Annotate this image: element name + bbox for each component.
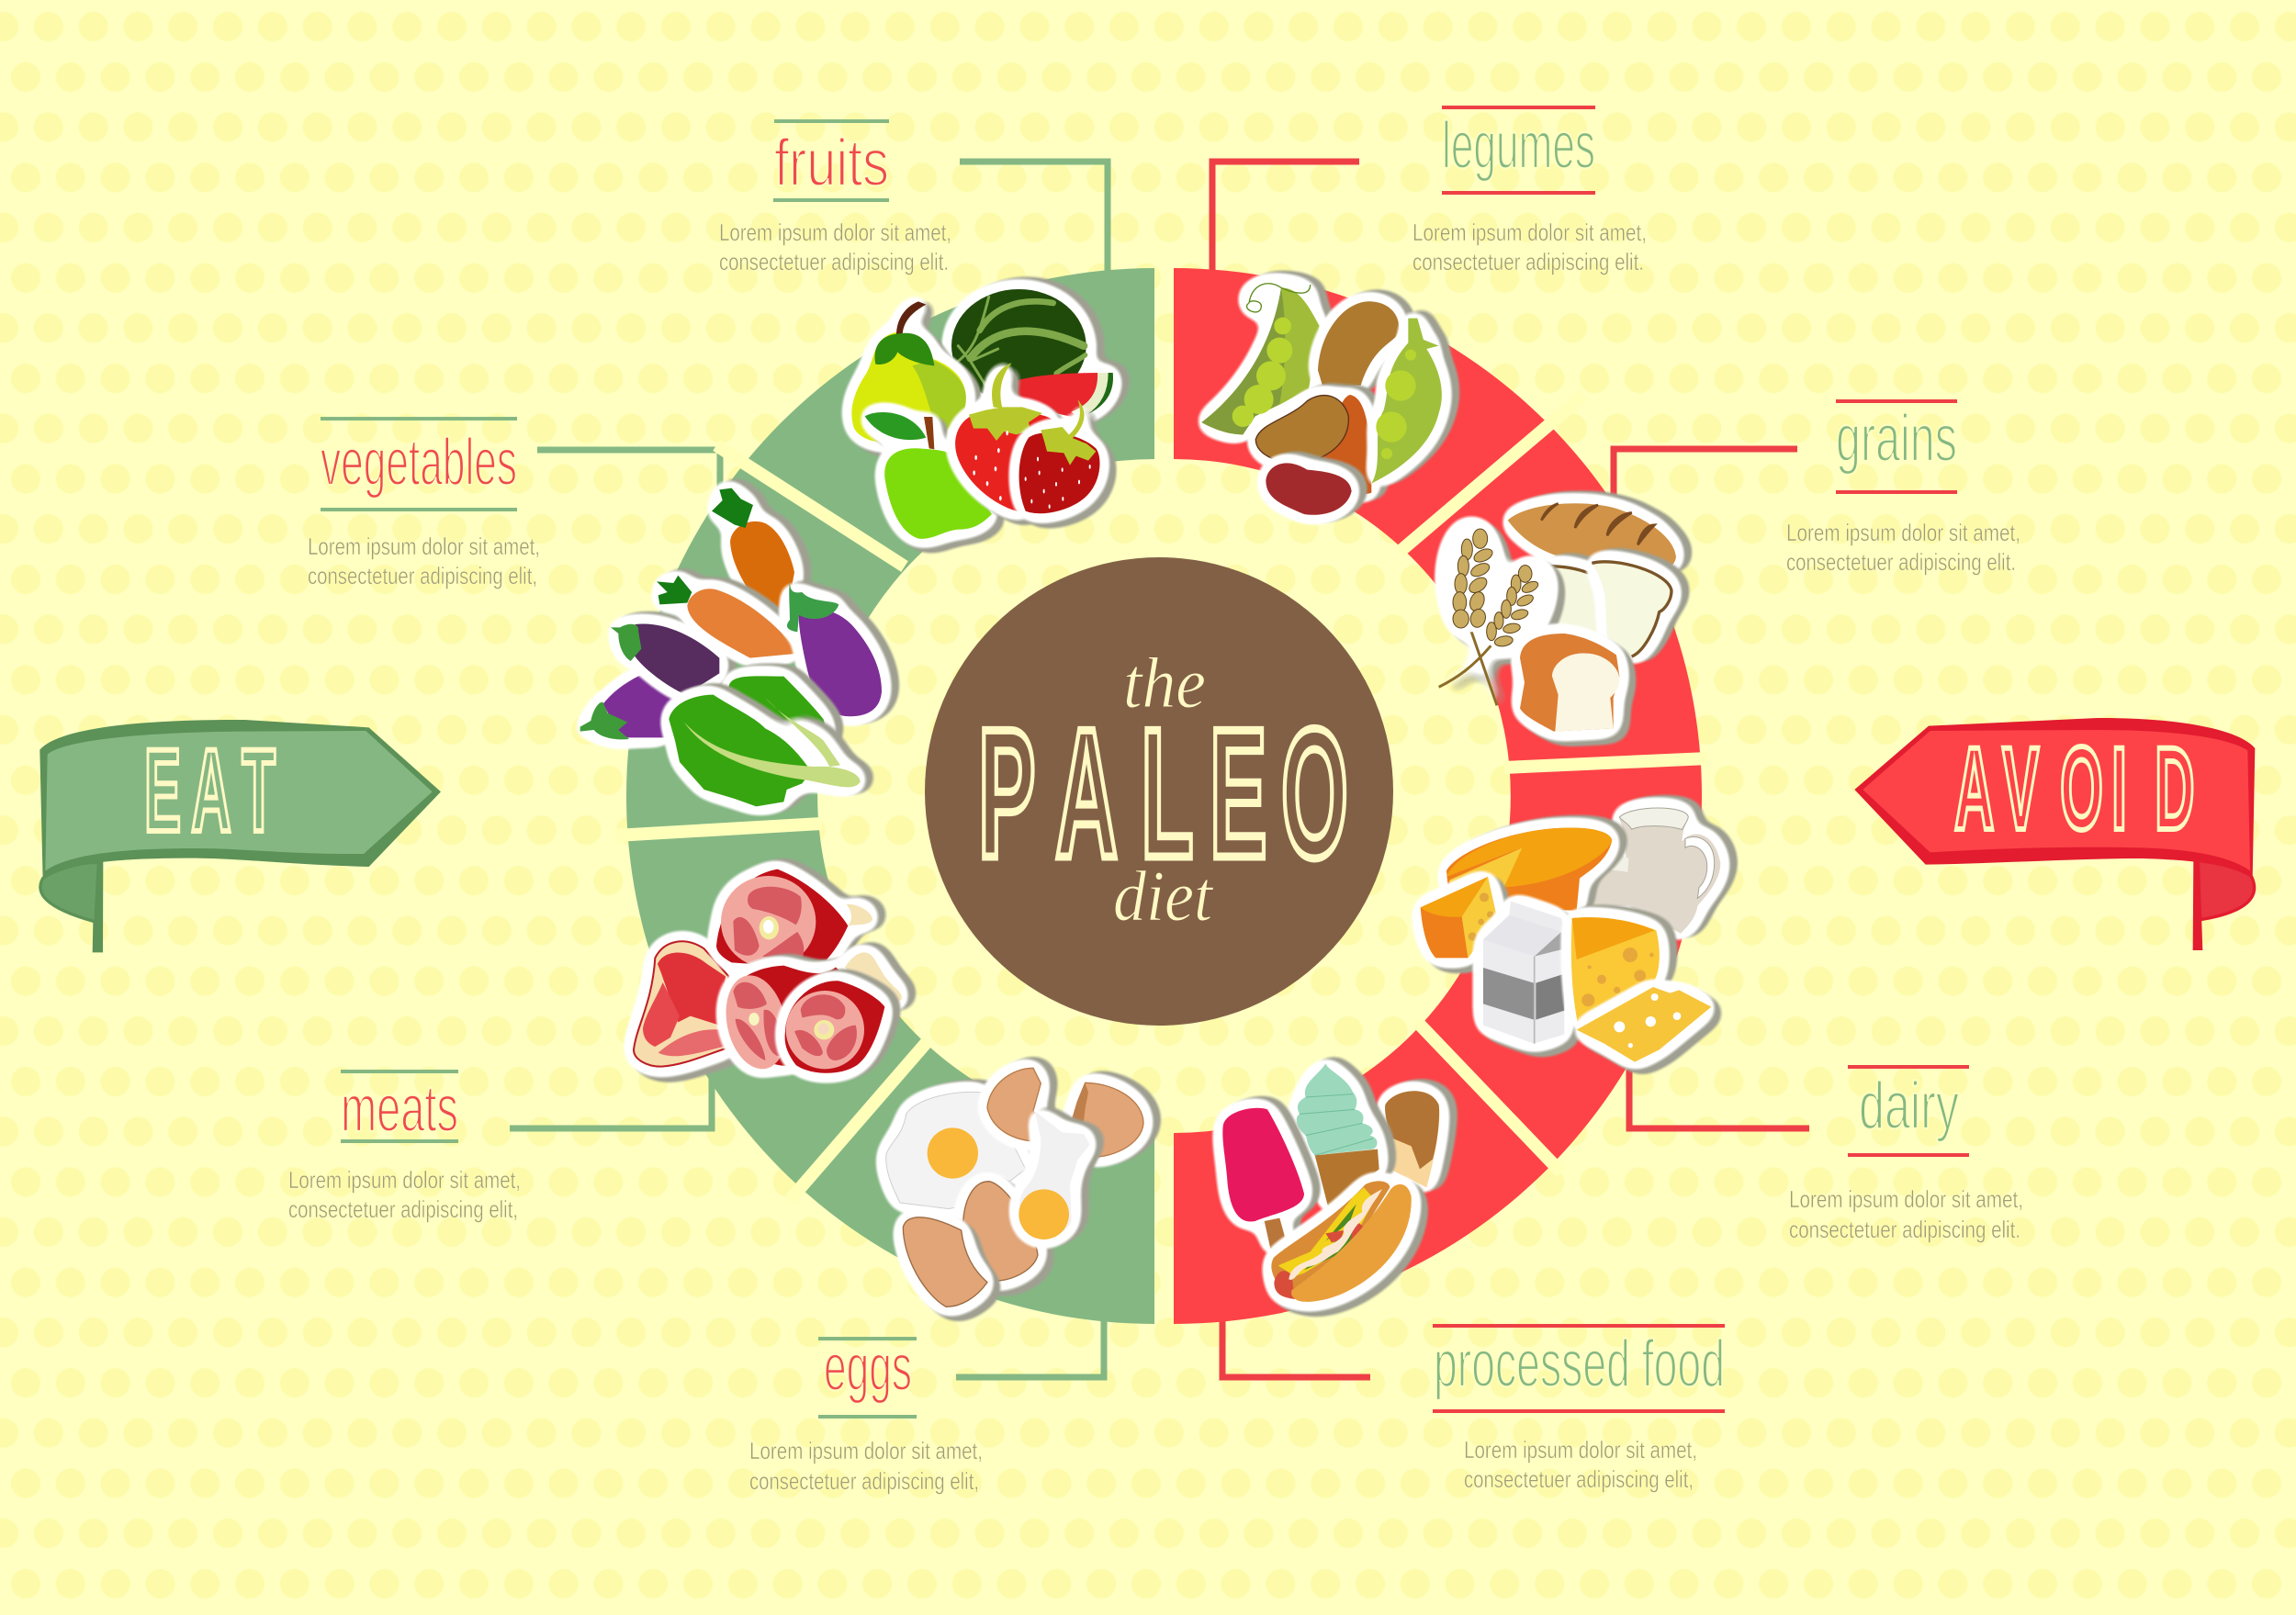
icon: legumes (1201, 283, 1442, 515)
label: vegetables: Lorem ipsum dolor sit amet, (308, 533, 540, 560)
icon: eggs (886, 1068, 1143, 1307)
ring: avoid half (1174, 268, 1702, 1324)
label: meats (288, 1070, 521, 1223)
icon: dairy (1421, 808, 1720, 1062)
label: vegetables (308, 417, 540, 589)
label: processed food (1433, 1324, 1725, 1493)
label: meats: consectetuer adipiscing elit, (288, 1195, 518, 1223)
center circle (925, 557, 1393, 1026)
icon: vegetables (580, 488, 882, 806)
label: eggs: consectetuer adipiscing elit, (749, 1467, 979, 1495)
banner: EAT (39, 720, 441, 952)
title: diet: diet (1113, 856, 1214, 936)
label: fruits (719, 119, 951, 275)
title: PALEO: PALEO (978, 692, 1348, 897)
ring segment gaps (615, 395, 1708, 1200)
label: fruits: Lorem ipsum dolor sit amet, (719, 219, 951, 246)
label: meats: Lorem ipsum dolor sit amet, (288, 1166, 521, 1194)
label: processed food: processed food (1434, 1328, 1725, 1401)
label: dairy: consectetuer adipiscing elit. (1789, 1216, 2020, 1243)
label: fruits: consectetuer adipiscing elit. (719, 248, 949, 275)
icon: meats (634, 869, 902, 1074)
banner: AVOID (1854, 718, 2255, 950)
label: grains: Lorem ipsum dolor sit amet, (1786, 519, 2020, 546)
label: processed food: consectetuer adipiscing elit, (1464, 1465, 1694, 1493)
label: legumes: legumes (1442, 109, 1595, 183)
label: vegetables: consectetuer adipiscing elit, (308, 562, 537, 589)
label: meats: meats (341, 1072, 458, 1146)
label: dairy: dairy (1859, 1070, 1959, 1143)
label: dairy (1789, 1065, 2023, 1243)
connector lines (510, 162, 1809, 1377)
label: eggs: Lorem ipsum dolor sit amet, (749, 1437, 983, 1464)
ring: eat half (626, 268, 1154, 1324)
label: dairy: Lorem ipsum dolor sit amet, (1789, 1185, 2023, 1213)
label: processed food: Lorem ipsum dolor sit amet, (1464, 1436, 1697, 1464)
label: fruits: fruits (774, 127, 889, 200)
label: eggs (749, 1331, 983, 1495)
label: grains: grains (1836, 402, 1957, 476)
banner: EAT: EAT (144, 725, 276, 857)
label: grains: consectetuer adipiscing elit. (1786, 548, 2016, 576)
label: legumes: consectetuer adipiscing elit. (1412, 248, 1644, 275)
label: legumes (1412, 106, 1647, 275)
icon: fruits (851, 289, 1113, 539)
label: eggs: eggs (824, 1331, 912, 1405)
label: grains (1786, 399, 2020, 576)
title: the: the (1123, 643, 1206, 723)
label: legumes: Lorem ipsum dolor sit amet, (1412, 219, 1647, 246)
label: vegetables: vegetables (321, 426, 517, 499)
icon: processed food (1222, 1063, 1439, 1302)
banner: AVOID: AVOID (1954, 723, 2195, 855)
icon: grains (1439, 503, 1676, 732)
